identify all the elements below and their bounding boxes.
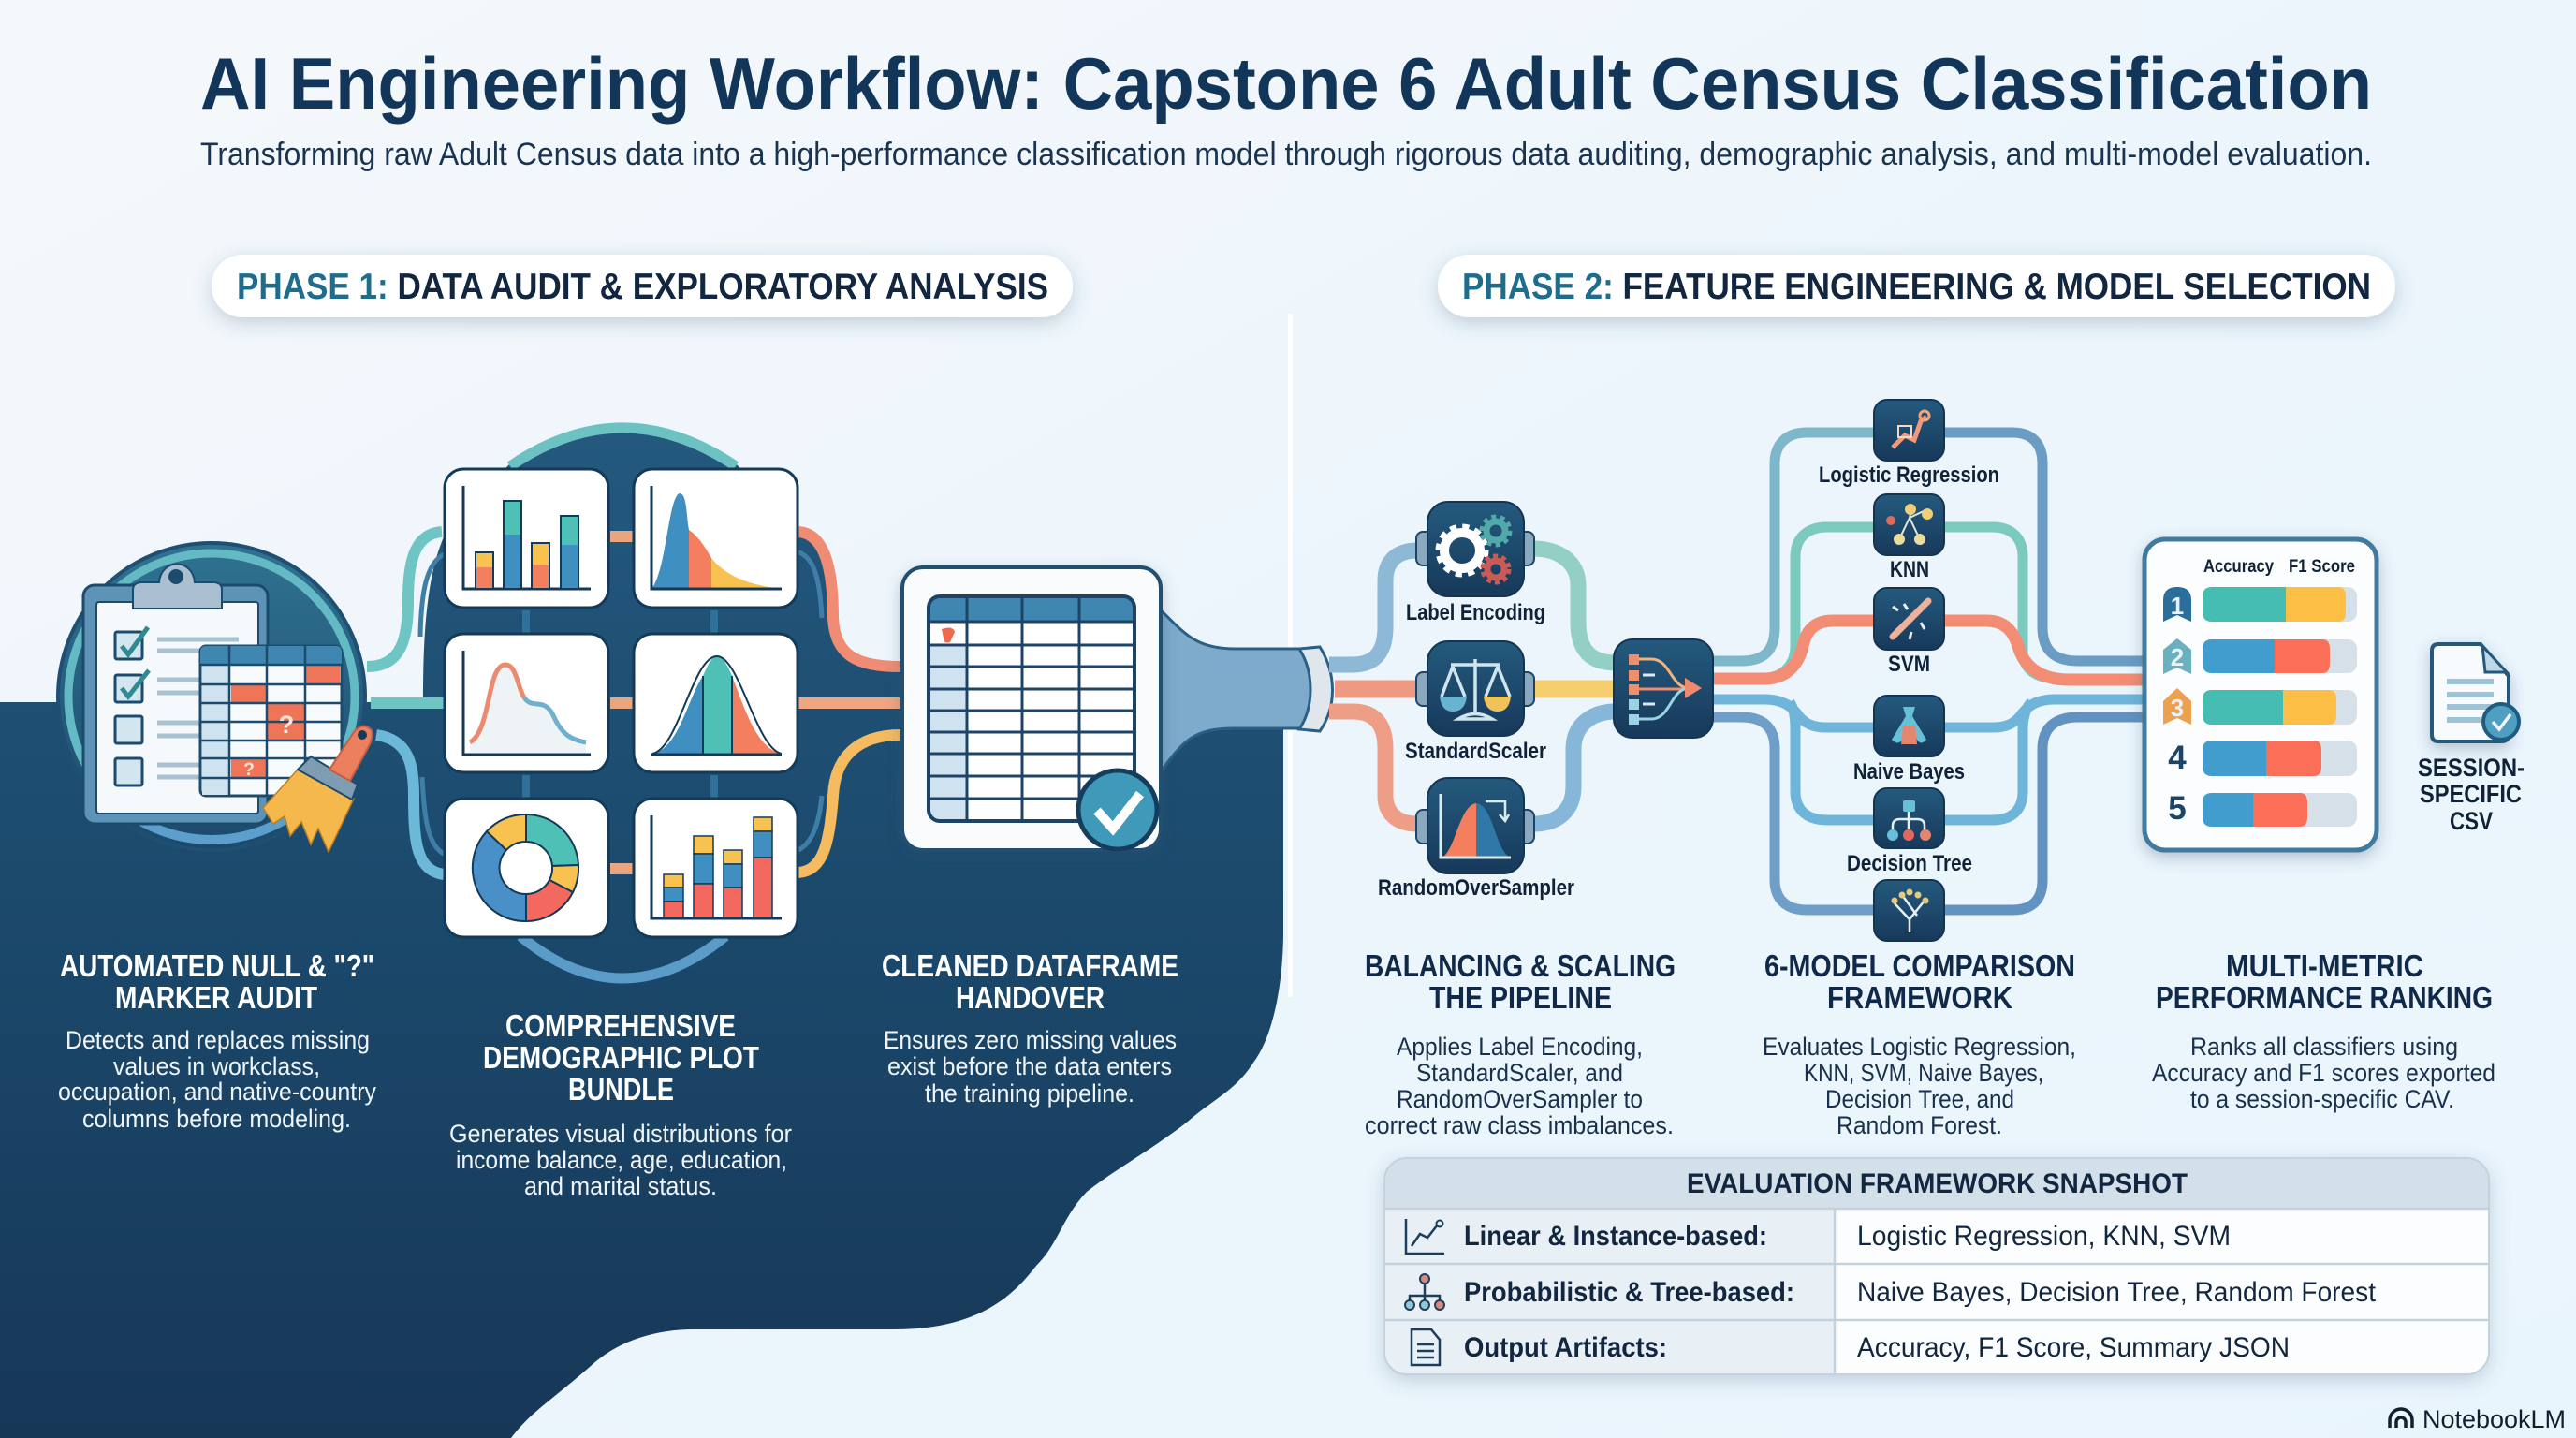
chart card: donut chart [445, 799, 608, 937]
model connector: logistic regression [1712, 433, 2145, 661]
arrow connectors: audit to plots [367, 532, 444, 874]
node: label encoding [1416, 502, 1534, 596]
rank badges: 2 [2171, 643, 2184, 671]
text block: demographic plot bundle: DEMOGRAPHIC PLOT [483, 1040, 759, 1075]
phase 2 heading pill: PHASE 2: FEATURE ENGINEERING & MODEL SELECTION [1462, 267, 2371, 307]
text block: cleaned dataframe handover: Ensures zero missing values [884, 1026, 1177, 1054]
icon: audit clipboard with data table and brush: ? [279, 711, 294, 739]
text block: automated null audit: occupation, and native-country [58, 1078, 376, 1106]
node: KNN [1874, 494, 1944, 555]
row: probabilistic and tree-based: Naive Bayes, Decision Tree, Random Forest [1857, 1277, 2377, 1308]
node: SVM [1874, 588, 1944, 650]
title: AI Engineering Workflow: Capstone 6 Adult Census Classification [200, 42, 2372, 125]
text block: automated null audit: MARKER AUDIT [115, 980, 317, 1015]
text block: 6-model comparison: 6-MODEL COMPARISON [1764, 948, 2075, 983]
row: linear and instance-based [1406, 1219, 2231, 1254]
label: random over sampler: RandomOverSampler [1378, 875, 1574, 901]
column headers: F1 Score [2289, 557, 2355, 577]
text block: demographic plot bundle [449, 1008, 792, 1200]
text block: multi-metric ranking: to a session-specific CAV. [2190, 1085, 2454, 1113]
text block: automated null audit: columns before modeling. [82, 1105, 351, 1133]
text block: 6-model comparison: KNN, SVM, Naive Bayes, [1804, 1059, 2043, 1087]
model connector: naive bayes [1712, 699, 2145, 727]
column headers: Accuracy [2203, 557, 2274, 577]
text block: 6-model comparison: Evaluates Logistic Regression, [1763, 1033, 2076, 1061]
icon: audit clipboard with data table and brush: ? [243, 760, 255, 780]
phase 1 heading pill [212, 255, 1073, 317]
chart card: bell curve [634, 634, 798, 772]
dataframe card with check badge [902, 567, 1161, 850]
text block: balancing and scaling: correct raw class imbalances. [1365, 1111, 1674, 1139]
node: naive bayes [1874, 696, 1944, 756]
text block: cleaned dataframe handover: the training pipeline. [925, 1079, 1134, 1108]
dark wave background panel [0, 429, 1283, 1438]
rank badges: 5 [2168, 790, 2187, 827]
row: linear and instance-based: Linear & Instance-based: [1464, 1221, 1767, 1252]
text block: automated null audit [58, 948, 376, 1133]
node: decision tree [1874, 788, 1944, 848]
text block: automated null audit: Detects and replaces missing [66, 1026, 370, 1054]
row: probabilistic and tree-based [1405, 1274, 2377, 1310]
text block: 6-model comparison: Random Forest. [1837, 1111, 2002, 1139]
text block: balancing and scaling: RandomOverSampler to [1397, 1085, 1643, 1113]
text block: multi-metric ranking [2152, 948, 2496, 1113]
label: session-specific csv: CSV [2450, 807, 2493, 835]
label: naive bayes: Naive Bayes [1853, 759, 1965, 785]
text block: 6-model comparison: Decision Tree, and [1825, 1085, 2014, 1113]
text block: demographic plot bundle: income balance, age, education, [456, 1146, 787, 1174]
label: session-specific csv: SESSION- [2418, 754, 2525, 782]
text block: 6-model comparison [1763, 948, 2076, 1139]
divider between phases [1288, 314, 1293, 997]
chart card: line density [445, 634, 608, 772]
label: session-specific csv [2418, 754, 2525, 835]
row: probabilistic and tree-based: Probabilistic & Tree-based: [1464, 1277, 1794, 1308]
icon: audit clipboard with data table and brush [68, 553, 373, 852]
node: random over sampler [1416, 778, 1534, 873]
text block: automated null audit: values in workclass, [113, 1052, 320, 1080]
label: session-specific csv: SPECIFIC [2420, 780, 2522, 808]
label: logistic regression: Logistic Regression [1819, 462, 1999, 488]
label: KNN: KNN [1890, 557, 1929, 582]
text block: automated null audit: AUTOMATED NULL & "?" [60, 948, 374, 983]
node: random forest [1874, 880, 1944, 941]
chart card: skewed distribution [634, 469, 798, 608]
model connector: SVM [1712, 621, 2145, 680]
row: output artifacts [1412, 1329, 2290, 1365]
rank badges [2163, 587, 2191, 827]
text block: balancing and scaling: BALANCING & SCALING [1365, 948, 1676, 983]
label: label encoding: Label Encoding [1406, 600, 1545, 625]
row: output artifacts: Output Artifacts: [1464, 1332, 1667, 1363]
text block: balancing and scaling [1365, 948, 1676, 1139]
text block: multi-metric ranking: Accuracy and F1 scores exported [2152, 1059, 2496, 1087]
row: output artifacts: Accuracy, F1 Score, Summary JSON [1857, 1332, 2290, 1363]
hub node [1614, 639, 1713, 738]
model connector: KNN [1712, 527, 2145, 679]
text block: balancing and scaling: Applies Label Encoding, [1397, 1033, 1643, 1061]
text block: balancing and scaling: StandardScaler, and [1416, 1059, 1623, 1087]
ranking card [2144, 539, 2377, 850]
text block: cleaned dataframe handover: exist before the data enters [887, 1052, 1172, 1080]
rank badges: 3 [2171, 694, 2184, 722]
model connector: random forest [1712, 717, 2145, 910]
rank badges: 1 [2171, 592, 2184, 620]
model connector: decision tree [1790, 702, 2031, 820]
text block: demographic plot bundle: and marital status. [524, 1172, 717, 1200]
column headers [2203, 557, 2355, 577]
arrow connectors: preprocessing nodes to hub [1533, 549, 1616, 824]
text block: cleaned dataframe handover: HANDOVER [956, 980, 1105, 1015]
text block: demographic plot bundle: BUNDLE [568, 1072, 674, 1107]
text block: demographic plot bundle: Generates visual distributions for [449, 1120, 792, 1148]
label: decision tree: Decision Tree [1847, 851, 1972, 876]
table heading: EVALUATION FRAMEWORK SNAPSHOT [1687, 1168, 2188, 1199]
NotebookLM logo: NotebookLM [2422, 1405, 2566, 1433]
text block: balancing and scaling: THE PIPELINE [1429, 980, 1612, 1015]
rank badges: 4 [2168, 740, 2187, 776]
node: standard scaler [1416, 641, 1534, 736]
arrow connectors: plots to dataframe [798, 532, 900, 873]
small links between plot cards [522, 531, 718, 874]
label: standard scaler: StandardScaler [1405, 739, 1546, 764]
text block: multi-metric ranking: PERFORMANCE RANKING [2156, 980, 2493, 1015]
subtitle: Transforming raw Adult Census data into a high-performance classification model through rigorous data auditing, demographic analysis, and multi-model evaluation. [200, 137, 2372, 172]
rank bars [2203, 587, 2357, 827]
text block: demographic plot bundle: COMPREHENSIVE [505, 1008, 736, 1043]
rings around plot grid [510, 428, 736, 978]
icon: session-specific csv document [2432, 644, 2519, 741]
text block: multi-metric ranking: Ranks all classifiers using [2190, 1033, 2458, 1061]
phase 1 heading pill: PHASE 1: DATA AUDIT & EXPLORATORY ANALYSIS [237, 267, 1048, 307]
phase 2 heading pill [1438, 255, 2395, 317]
arrow connectors: funnel to preprocessing nodes [1329, 550, 1417, 824]
funnel from dataframe to pipeline [1159, 609, 1333, 774]
chart card: stacked bars [634, 799, 798, 937]
text block: 6-model comparison: FRAMEWORK [1827, 980, 2012, 1015]
node: logistic regression [1874, 400, 1944, 461]
text block: cleaned dataframe handover [882, 948, 1178, 1108]
text block: multi-metric ranking: MULTI-METRIC [2226, 948, 2423, 983]
text block: cleaned dataframe handover: CLEANED DATAFRAME [882, 948, 1178, 983]
evaluation framework snapshot table [1384, 1158, 2489, 1374]
chart card: bar chart [445, 469, 608, 608]
label: SVM: SVM [1888, 652, 1930, 677]
row: linear and instance-based: Logistic Regression, KNN, SVM [1857, 1221, 2231, 1252]
